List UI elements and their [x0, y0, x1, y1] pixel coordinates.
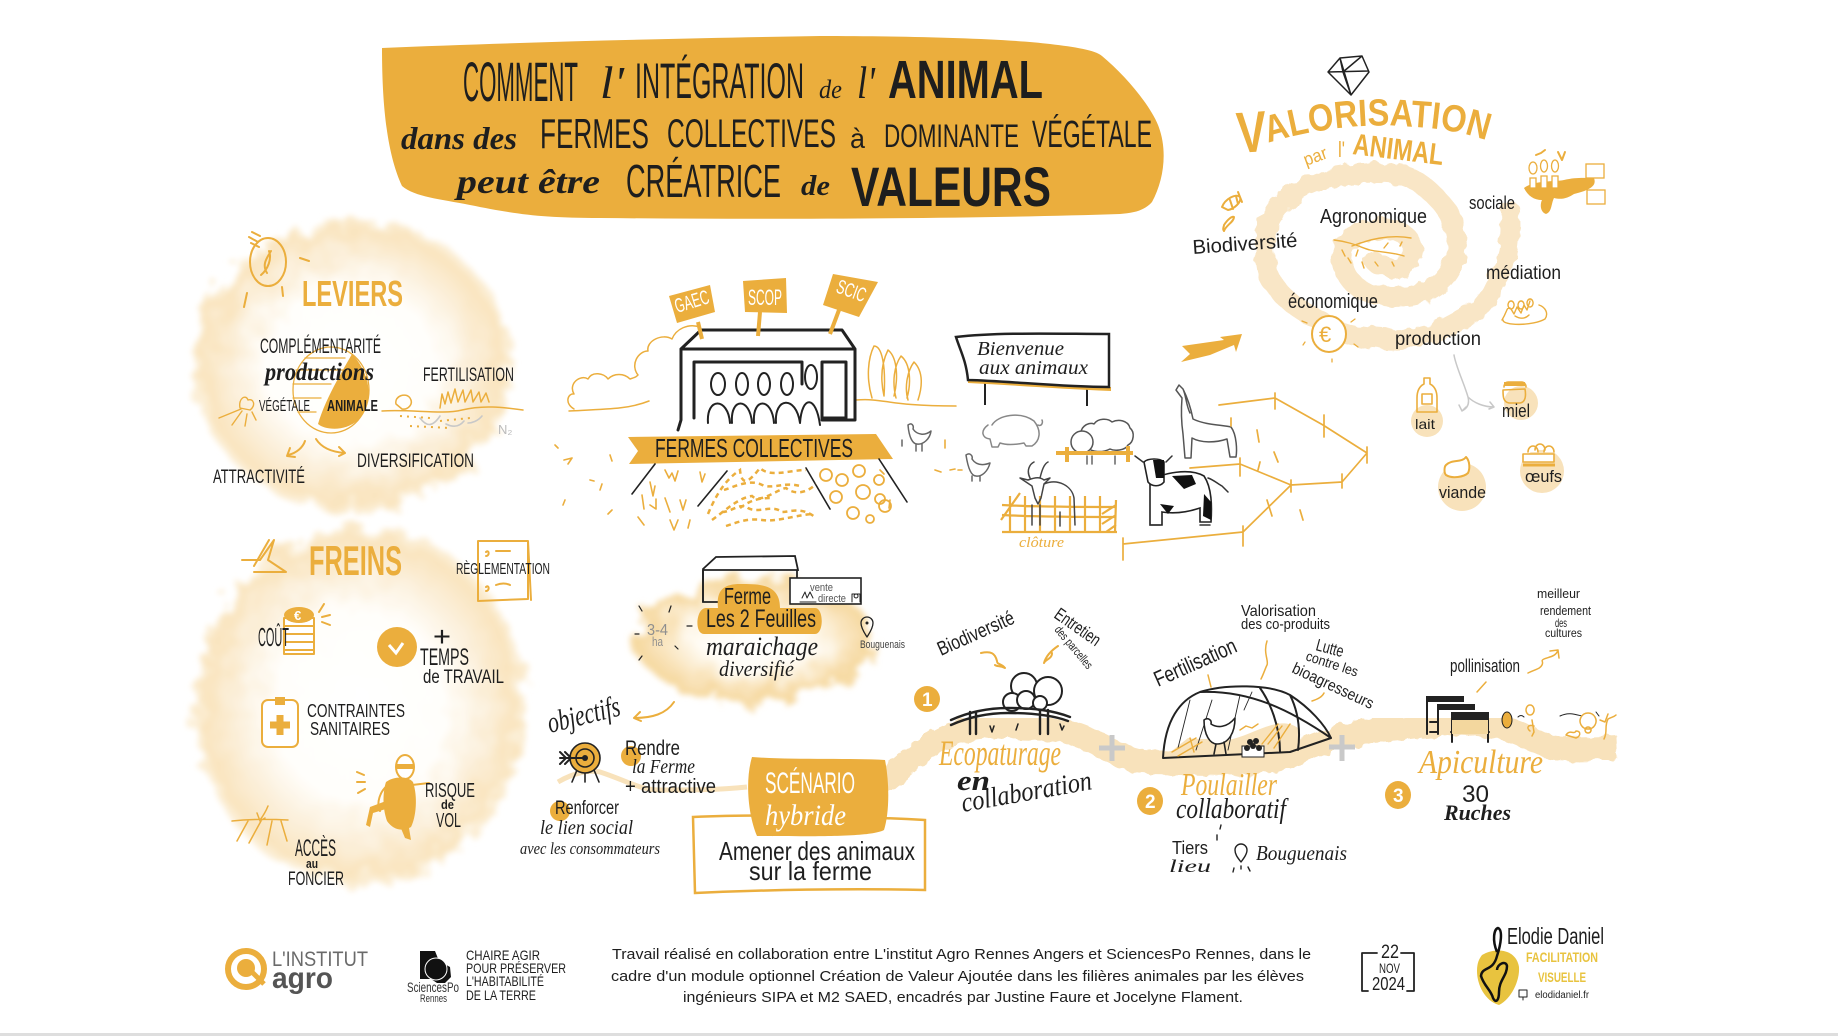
objective: rendre la ferme attractive — [621, 737, 716, 798]
pasture fence — [1123, 393, 1367, 560]
arrow: production split — [1454, 355, 1494, 411]
welcome sign: Bienvenue — [977, 338, 1064, 360]
product: miel — [1502, 382, 1538, 421]
icon: coins: € — [294, 608, 301, 623]
logo: sciencespo rennes: SciencesPo — [407, 979, 459, 995]
objective: renforcer le lien social — [520, 798, 660, 858]
central illustration: fermes collectives — [555, 274, 962, 530]
icon: medical clipboard — [262, 697, 298, 747]
signs: gaec scop scic — [669, 274, 878, 339]
text: chaire agir: L'HABITABILITÉ — [466, 973, 544, 989]
title banner: DOMINANTE — [884, 118, 1019, 154]
text: fertilisation: FERTILISATION — [423, 365, 514, 386]
scenery: cloud tree, poplars and hills — [568, 326, 956, 411]
objective: rendre la ferme attractive: + attractive — [625, 776, 716, 798]
cow — [1135, 456, 1228, 525]
icon: sheep on ridge — [951, 673, 1070, 734]
logo: sciencespo rennes — [407, 951, 459, 1005]
objective: renforcer le lien social: le lien social — [540, 817, 633, 839]
arrows: diversification and attractivite — [287, 439, 345, 457]
badge 3: 3 — [1393, 786, 1404, 807]
connector band — [558, 771, 747, 790]
icon: regulation document — [478, 541, 531, 601]
badge 1 — [914, 686, 940, 712]
title banner: VALEURS — [851, 155, 1051, 218]
icon: light bulb — [244, 232, 309, 307]
label: mediation: médiation — [1486, 263, 1561, 284]
label: lutte contre les bioagresseurs — [1289, 636, 1376, 713]
title banner: de — [819, 75, 842, 104]
scenario hybride box: Amener des animaux — [719, 836, 915, 866]
logo: sciencespo rennes: Rennes — [420, 993, 447, 1005]
logo: elodie daniel: VISUELLE — [1538, 969, 1586, 985]
building and direct sale stall — [703, 556, 861, 605]
text: contraintes sanitaires: SANITAIRES — [310, 719, 390, 739]
link dashes — [1217, 825, 1221, 840]
scenario hybride box: hybride — [765, 799, 846, 832]
footer — [228, 923, 1604, 1006]
text: contraintes sanitaires: CONTRAINTES — [307, 701, 405, 721]
date — [1362, 942, 1414, 994]
icon: plant sprout — [219, 397, 256, 426]
step 1: ecopaturage — [914, 604, 1105, 819]
section: objectifs — [520, 690, 747, 858]
label: ferme les 2 feuilles — [697, 583, 822, 634]
product: viande — [1438, 457, 1486, 511]
icon: hives — [1426, 696, 1489, 742]
scenario hybride box: sur la ferme — [749, 856, 872, 886]
heading: leviers: LEVIERS — [302, 273, 403, 314]
label: production: production — [1395, 329, 1481, 350]
title banner: l' — [600, 57, 625, 108]
icon: chicken — [902, 424, 931, 451]
badge 2: 2 — [1145, 792, 1156, 813]
text: animale: ANIMALE — [327, 398, 378, 415]
icon: land plot — [232, 806, 288, 845]
text: reglementation: RÈGLEMENTATION — [456, 559, 550, 578]
text: plus temps de travail: TEMPS — [420, 644, 469, 671]
title banner: peut être — [453, 164, 600, 201]
icon: coins — [284, 604, 330, 654]
icon: group around table — [1524, 150, 1605, 214]
signs: gaec scop scic: SCOP — [748, 285, 782, 310]
horse — [1176, 385, 1236, 458]
plus sign — [1099, 735, 1125, 761]
heading: objectifs: objectifs — [544, 690, 623, 740]
text: plus temps de travail: + — [433, 621, 451, 652]
text: risque de vol: VOL — [436, 810, 461, 832]
label: ferme les 2 feuilles: Les 2 Feuilles — [706, 605, 816, 633]
text: diversification: DIVERSIFICATION — [357, 451, 474, 472]
date: NOV — [1379, 960, 1400, 976]
label: lutte contre les bioagresseurs: contre les — [1304, 648, 1360, 680]
text: plus temps de travail — [420, 621, 504, 688]
title banner: de — [801, 171, 830, 202]
title banner — [382, 36, 1164, 219]
text: 30 ruches: Ruches — [1443, 800, 1511, 825]
banner: FERMES COLLECTIVES — [655, 433, 853, 463]
signs: gaec scop scic: SCIC — [833, 276, 869, 307]
logo: institut agro: L'INSTITUT — [272, 948, 368, 971]
label: sociale: sociale — [1469, 193, 1515, 213]
label: lutte contre les bioagresseurs: bioagresseurs — [1289, 660, 1376, 713]
logo: institut agro: agro — [272, 962, 333, 995]
text: credits: Travail réalisé en collaboration entre L'institut Agro Rennes Angers et SciencesPo Rennes, dans le — [612, 946, 1311, 963]
title banner: VÉGÉTALE — [1032, 113, 1152, 156]
product: lait — [1411, 378, 1443, 437]
text: chaire agir: DE LA TERRE — [466, 987, 536, 1003]
label: fertilisation: Fertilisation — [1150, 633, 1240, 692]
text: productions: productions — [263, 359, 374, 386]
text: en collaboration: en — [957, 766, 990, 797]
date: 2024 — [1372, 974, 1405, 994]
arrows — [981, 646, 1058, 668]
text: chaire agir: CHAIRE AGIR — [466, 947, 540, 963]
text: acces au foncier: ACCÈS — [295, 835, 336, 862]
logo: elodie daniel: Elodie Daniel — [1507, 923, 1604, 949]
label: entretien des parcelles: des parcelles — [1052, 623, 1096, 672]
heading: valorisation: V — [1234, 99, 1269, 166]
text: collaboratif: collaboratif — [1176, 794, 1289, 825]
text: tiers lieu bouguenais: lieu — [1169, 856, 1211, 876]
label: meilleur rendement des cultures: cultures — [1545, 626, 1582, 640]
arrows — [1208, 641, 1324, 701]
title banner: INTÉGRATION — [635, 53, 804, 109]
heading: valorisation — [1234, 99, 1492, 166]
people — [708, 365, 820, 425]
icon: bee and flowers — [1502, 705, 1616, 739]
label: valorisation des co-produits — [1241, 603, 1330, 633]
text: cloture: clôture — [1019, 535, 1064, 551]
icon: people group — [1502, 299, 1547, 324]
badge 2 — [1137, 787, 1163, 815]
wave band — [880, 724, 1617, 785]
title banner: COMMENT — [463, 50, 578, 113]
title banner: CRÉATRICE — [626, 155, 781, 207]
illustration: soil and grass: N₂ — [498, 422, 512, 437]
text: credits — [611, 946, 1311, 1006]
objective: rendre la ferme attractive: Rendre — [625, 737, 680, 760]
goat with fence — [1001, 462, 1117, 532]
landscape sketch in spiral — [1334, 237, 1411, 268]
text: risque de vol: RISQUE — [425, 780, 475, 802]
text: par l'animal: l' — [1338, 137, 1345, 162]
sheep — [1056, 419, 1133, 464]
signs: gaec scop scic: GAEC — [672, 287, 712, 318]
text: credits: ingénieurs SIPA et M2 SAED, encadrés par Justine Faure et Jocelyne Flament. — [683, 989, 1243, 1006]
building — [678, 330, 855, 430]
label: meilleur rendement des cultures — [1537, 586, 1591, 640]
welcome sign — [956, 334, 1111, 406]
icon: bee — [1222, 192, 1242, 231]
text: maraichage diversifie: diversifié — [719, 656, 795, 681]
icon: thief running — [357, 755, 429, 840]
product: lait: lait — [1415, 416, 1435, 432]
text: contraintes sanitaires — [307, 701, 405, 739]
text: risque de vol — [425, 780, 475, 832]
icon: clock — [377, 627, 417, 667]
icon: chicken — [966, 454, 990, 481]
step 3: apiculture — [1385, 586, 1616, 825]
text: surface 3-4 ha: 3-4 — [647, 622, 668, 639]
label: biodiversite: Biodiversité — [934, 607, 1018, 661]
label: economique: économique — [1288, 291, 1378, 313]
step 2: poulailler — [1137, 603, 1376, 876]
product: oeufs: œufs — [1525, 467, 1562, 486]
icon: diamond — [1328, 56, 1369, 95]
icon: euro: € — [1319, 322, 1331, 347]
pig — [983, 415, 1042, 447]
label: valorisation des co-produits: Valorisation — [1241, 603, 1316, 620]
text: 30 ruches: 30 — [1462, 781, 1489, 808]
label: entretien des parcelles: Entretien — [1051, 604, 1105, 650]
badge 3 — [1385, 781, 1411, 809]
arrow — [634, 702, 674, 721]
text: vegetale: VÉGÉTALE — [259, 396, 310, 415]
heading: apiculture: Apiculture — [1417, 744, 1543, 781]
text: tiers lieu bouguenais: Tiers — [1172, 838, 1208, 858]
text: maraichage diversifie: maraichage — [706, 632, 818, 661]
text: tiers lieu bouguenais — [1169, 838, 1347, 876]
text: plus temps de travail: de TRAVAIL — [423, 667, 504, 688]
orb: productions — [293, 347, 369, 433]
label: pollinisation: pollinisation — [1450, 656, 1520, 676]
welcome sign: aux animaux — [979, 357, 1088, 379]
label: meilleur rendement des cultures: rendement — [1540, 603, 1591, 618]
text: par l'animal — [1301, 128, 1445, 172]
text: credits: cadre d'un module optionnel Création de Valeur Ajoutée dans les filières animales par les élèves — [611, 968, 1304, 985]
date: 22 — [1381, 942, 1399, 963]
title banner: l' — [857, 57, 876, 108]
heading: poulailler: Poulailler — [1180, 766, 1277, 802]
logo: elodie daniel — [1477, 923, 1604, 1005]
bottom strip — [0, 1033, 1838, 1036]
icon: location pin — [860, 617, 905, 651]
text: par l'animal: ANIMAL — [1351, 128, 1445, 172]
title banner: FERMES — [540, 110, 649, 157]
text: acces au foncier: au — [306, 856, 318, 871]
title banner: dans des — [401, 120, 517, 156]
panel: freins — [194, 526, 550, 890]
text: chaire agir — [466, 947, 566, 1003]
label: entretien des parcelles — [1051, 604, 1105, 672]
text: maraichage diversifie — [706, 632, 818, 681]
icon: euro — [1302, 316, 1358, 362]
field lines and crops — [555, 440, 962, 530]
panel: ferme les 2 feuilles — [633, 556, 905, 702]
label: lutte contre les bioagresseurs: Lutte — [1314, 636, 1346, 661]
panel: leviers — [192, 219, 523, 511]
scenario hybride box — [693, 757, 925, 893]
panel: freins: COÛT — [258, 622, 289, 652]
arrows — [1477, 650, 1559, 692]
product: viande: viande — [1439, 483, 1486, 502]
objective: renforcer le lien social: avec les consommateurs — [520, 839, 660, 858]
text: 30 ruches — [1443, 781, 1511, 825]
heading: valorisation: ALORISATION — [1268, 99, 1492, 142]
text: risque de vol: de — [441, 797, 454, 812]
building and direct sale stall: vente — [810, 582, 833, 594]
text: complementarite: COMPLÉMENTARITÉ — [260, 335, 381, 358]
objective: rendre la ferme attractive: la Ferme — [632, 756, 695, 778]
text: surface 3-4 ha: ha — [652, 634, 664, 649]
label: valorisation des co-produits: des co-produits — [1241, 616, 1330, 633]
title banner: ANIMAL — [888, 50, 1043, 110]
text: en collaboration: collaboration — [959, 765, 1094, 819]
text: chaire agir: POUR PRÉSERVER — [466, 960, 566, 976]
title banner: à — [850, 123, 865, 154]
logo: elodie daniel: elodidaniel.fr — [1535, 990, 1590, 1001]
label: meilleur rendement des cultures: meilleur — [1537, 586, 1581, 601]
label: agronomique: Agronomique — [1320, 206, 1427, 228]
label: ferme les 2 feuilles: Ferme — [724, 583, 771, 609]
product: miel: miel — [1502, 401, 1530, 421]
text: surface 3-4 ha — [635, 606, 692, 660]
objective: renforcer le lien social: Renforcer — [555, 798, 620, 819]
logo: institut agro — [228, 948, 368, 995]
panel: valorisation — [1192, 55, 1606, 511]
icon: greenhouse with chicken — [1163, 686, 1331, 758]
arrow to valorisation — [1181, 334, 1242, 362]
icon: target — [560, 743, 600, 782]
logo: elodie daniel: FACILITATION — [1526, 949, 1598, 965]
text: par l'animal: par — [1301, 143, 1330, 170]
label: biodiversite: Biodiversité — [1192, 230, 1298, 259]
text: acces au foncier — [288, 835, 344, 890]
heading: ecopaturage: Ecopaturage — [938, 733, 1061, 773]
title banner: COLLECTIVES — [667, 112, 836, 156]
building and direct sale stall: directe — [818, 593, 846, 605]
product: oeufs — [1520, 444, 1564, 493]
icon: location pin: Bouguenais — [860, 639, 905, 651]
illustration: soil and grass — [382, 389, 523, 437]
animals — [966, 385, 1367, 560]
plus sign — [1329, 735, 1355, 761]
text: tiers lieu bouguenais: Bouguenais — [1256, 841, 1347, 865]
spiral — [1265, 173, 1510, 339]
scenario hybride box: SCÉNARIO — [765, 767, 855, 800]
label: meilleur rendement des cultures: des — [1555, 616, 1567, 630]
text: acces au foncier: FONCIER — [288, 869, 344, 890]
text: attractivite: ATTRACTIVITÉ — [213, 467, 305, 488]
badge 1: 1 — [922, 690, 933, 711]
icon: broken arrow obstacle — [242, 540, 286, 572]
heading: freins: FREINS — [309, 537, 402, 584]
